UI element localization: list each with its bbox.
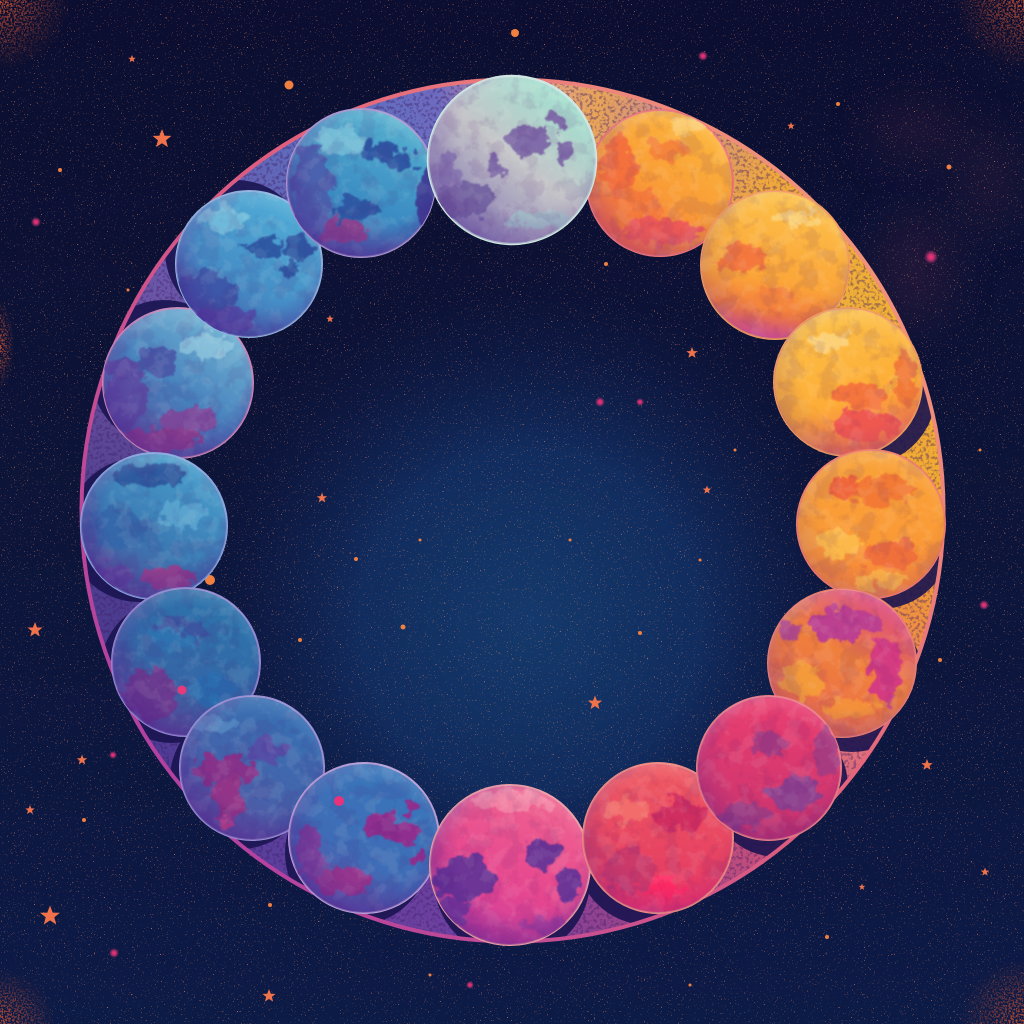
moon: blue 11 (179, 695, 325, 841)
moon: crimson 7 (696, 695, 842, 841)
moon: amber 2 (588, 109, 734, 257)
moon: amber 4 (773, 307, 923, 456)
detail: red dot on moon 12 (178, 686, 186, 694)
moon ring artwork (80, 74, 946, 946)
moon: magenta 9 (429, 784, 590, 946)
ring rim (82, 80, 944, 942)
moon: blue-magenta 10 (288, 762, 439, 914)
moon: blue 15 (175, 190, 323, 338)
moon: mint-lavender full moon 1 (426, 74, 598, 246)
ring band with rainbow gradient (80, 78, 945, 943)
ring texture and moon shadows (84, 83, 942, 938)
moon: blue 16 (286, 108, 435, 258)
moon: red-pink 8 (582, 762, 734, 914)
moon: blue 12 (111, 587, 261, 737)
moon: orange 5 (796, 449, 946, 598)
moon: amber 3 (700, 190, 850, 340)
moon: blue 13 (80, 452, 228, 600)
detail: red dot on moon 10 (334, 796, 344, 806)
moon: orange-pink 6 (767, 588, 917, 738)
moon: blue-purple 14 (102, 307, 254, 459)
